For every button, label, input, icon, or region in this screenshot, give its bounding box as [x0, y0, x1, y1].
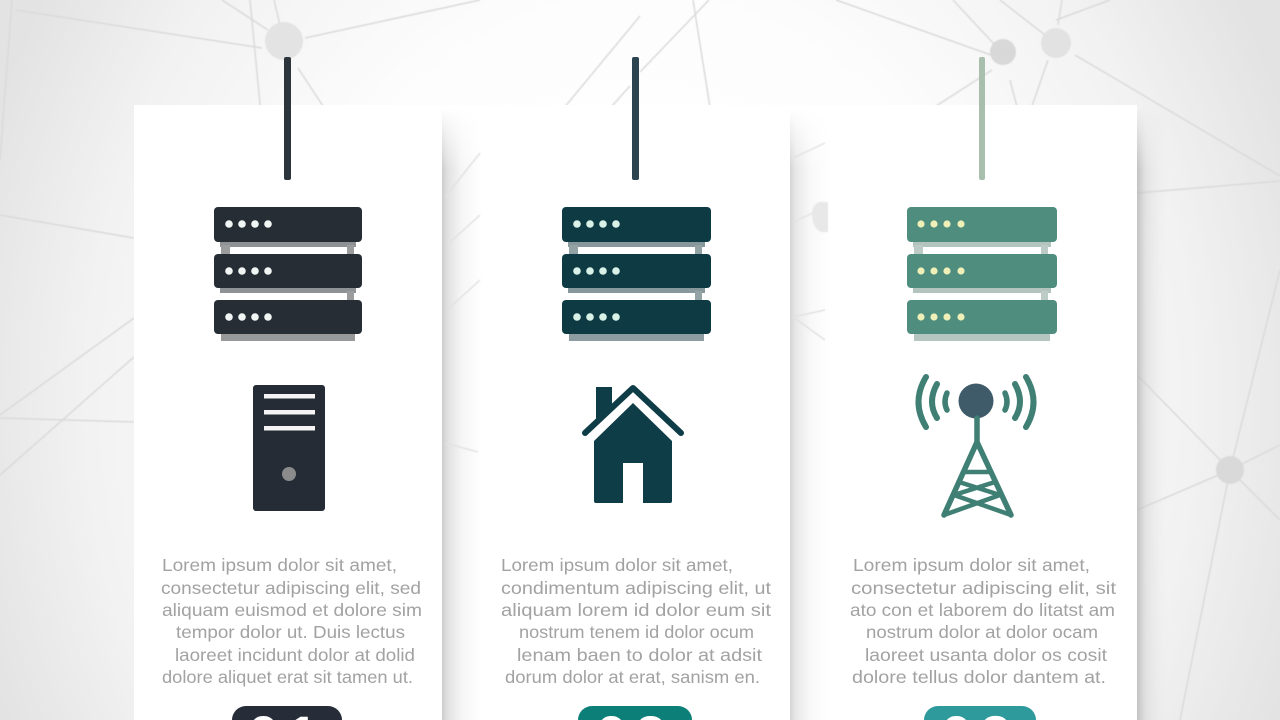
panel: card 1	[134, 105, 442, 720]
hanging line 2	[632, 57, 639, 180]
number badge 3	[924, 706, 1036, 720]
text block: card 3: consectetur adipiscing elit, sit	[851, 578, 1116, 598]
hanging line 3	[979, 57, 985, 180]
text block: card 3: nostrum dolor at dolor ocam	[866, 622, 1098, 642]
text block: card 2: dorum dolor at erat, sanism en.	[505, 667, 760, 687]
text block: card 2: lenam baen to dolor at adsit	[517, 645, 762, 665]
icon: server rack 3	[907, 207, 1057, 341]
text block: card 1: aliquam euismod et dolore sim	[162, 600, 422, 620]
panel: card 2	[442, 105, 714, 720]
text block: card 1: laoreet incidunt dolor at dolid	[175, 645, 415, 665]
icon: computer tower	[253, 385, 325, 511]
network nodes	[265, 22, 1244, 484]
text block: card 2: nostrum tenem id dolor ocum	[519, 622, 754, 642]
panel: card 3	[790, 105, 1137, 720]
text block: card 2	[501, 555, 771, 687]
number badge 2	[578, 706, 692, 720]
text block: card 3: laoreet usanta dolor os cosit	[865, 645, 1107, 665]
icon: server rack 2	[562, 207, 711, 341]
text block: card 1: Lorem ipsum dolor sit amet,	[162, 555, 397, 575]
icon: house	[585, 387, 681, 503]
text block: card 3	[850, 555, 1116, 687]
text block: card 1: dolore aliquet erat sit tamen ut.	[162, 667, 413, 687]
text block: card 1	[161, 555, 422, 687]
text block: card 3: dolore tellus dolor dantem at.	[852, 667, 1106, 687]
shadow of third panel	[1137, 118, 1154, 720]
text block: card 3: ato con et laborem do litatst am	[850, 600, 1115, 620]
text block: card 2: Lorem ipsum dolor sit amet,	[501, 555, 733, 575]
hanging line 1	[284, 57, 291, 180]
text block: card 1: consectetur adipiscing elit, sed	[161, 578, 421, 598]
network pattern showing through cards	[445, 143, 828, 452]
icon: server rack 1	[214, 207, 362, 341]
text block: card 2: condimentum adipiscing elit, ut	[501, 578, 771, 598]
text block: card 3: Lorem ipsum dolor sit amet,	[853, 555, 1090, 575]
text block: card 2: aliquam lorem id dolor eum sit	[501, 600, 771, 620]
text block: card 1: tempor dolor ut. Duis lectus	[176, 622, 405, 642]
icon: signal tower	[918, 377, 1034, 515]
